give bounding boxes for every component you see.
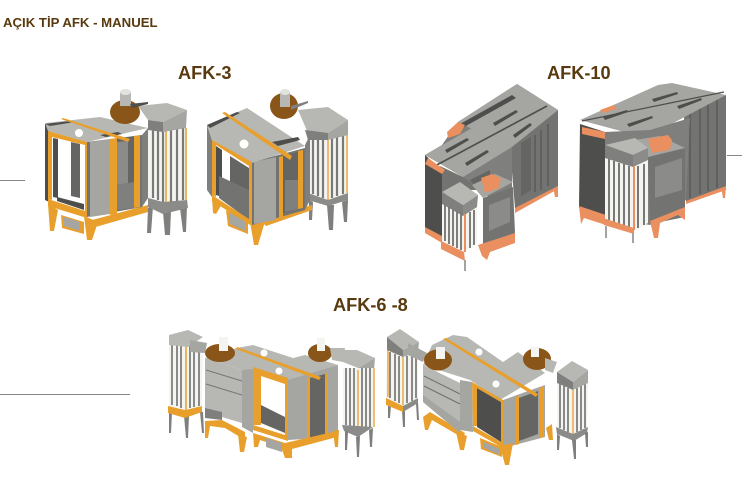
machine: AFK-6-8 right <box>386 329 588 465</box>
heading: AFK-3: AFK-3 <box>178 63 232 83</box>
title: AÇIK TİP AFK - MANUEL <box>3 15 158 30</box>
machine: AFK-3 right <box>207 89 348 245</box>
heading: AFK-10: AFK-10 <box>547 63 611 83</box>
machine: AFK-10 left <box>425 84 558 271</box>
machine: AFK-10 right <box>579 83 726 243</box>
machine: AFK-3 left <box>45 89 188 240</box>
machine: AFK-6-8 left <box>168 330 375 458</box>
heading: AFK-6 -8: AFK-6 -8 <box>333 295 408 315</box>
